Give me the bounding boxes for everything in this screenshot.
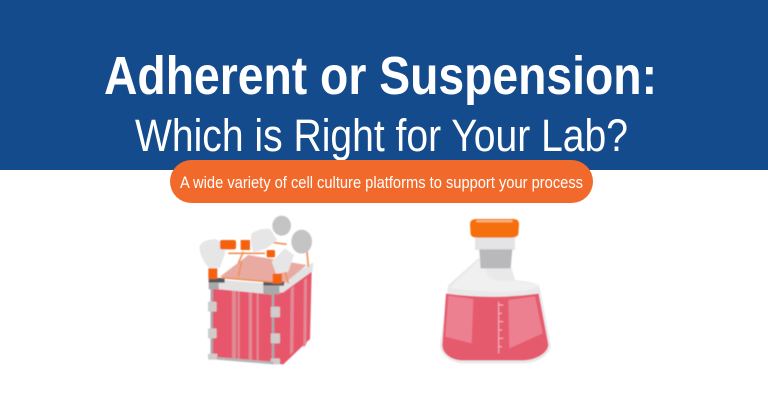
- orange connectors: [208, 240, 282, 284]
- flask outer body: [440, 258, 551, 363]
- subtitle pill: A wide variety of cell culture platforms to support your process: [180, 173, 583, 192]
- orange cap: [470, 219, 519, 238]
- subtitle pill: [170, 160, 593, 203]
- grey discs: [272, 216, 312, 254]
- corner brackets: [209, 278, 284, 286]
- title: [104, 46, 657, 161]
- vessel lid rim: [210, 262, 313, 294]
- tubing: [222, 242, 308, 283]
- vessel lid top: [220, 255, 307, 284]
- graduation marks: [499, 302, 503, 353]
- white bags: [199, 229, 294, 274]
- title: Which is Right for Your Lab?: [135, 110, 628, 161]
- title: Adherent or Suspension:: [104, 46, 657, 106]
- liquid highlights: [445, 296, 543, 348]
- threaded band: [479, 249, 512, 268]
- vessel right face: [273, 272, 312, 364]
- icon: suspension culture flask: [440, 219, 551, 363]
- icon: adherent cell culture vessel: [199, 216, 313, 364]
- shoulder: [450, 260, 538, 292]
- vessel front face: [211, 288, 274, 364]
- liquid: [442, 294, 548, 360]
- vessel stripes: [232, 278, 307, 362]
- neck: [475, 237, 515, 250]
- header band: [0, 0, 768, 170]
- cap highlights: [476, 220, 513, 222]
- side clips: [208, 302, 280, 364]
- base rail: [217, 357, 273, 364]
